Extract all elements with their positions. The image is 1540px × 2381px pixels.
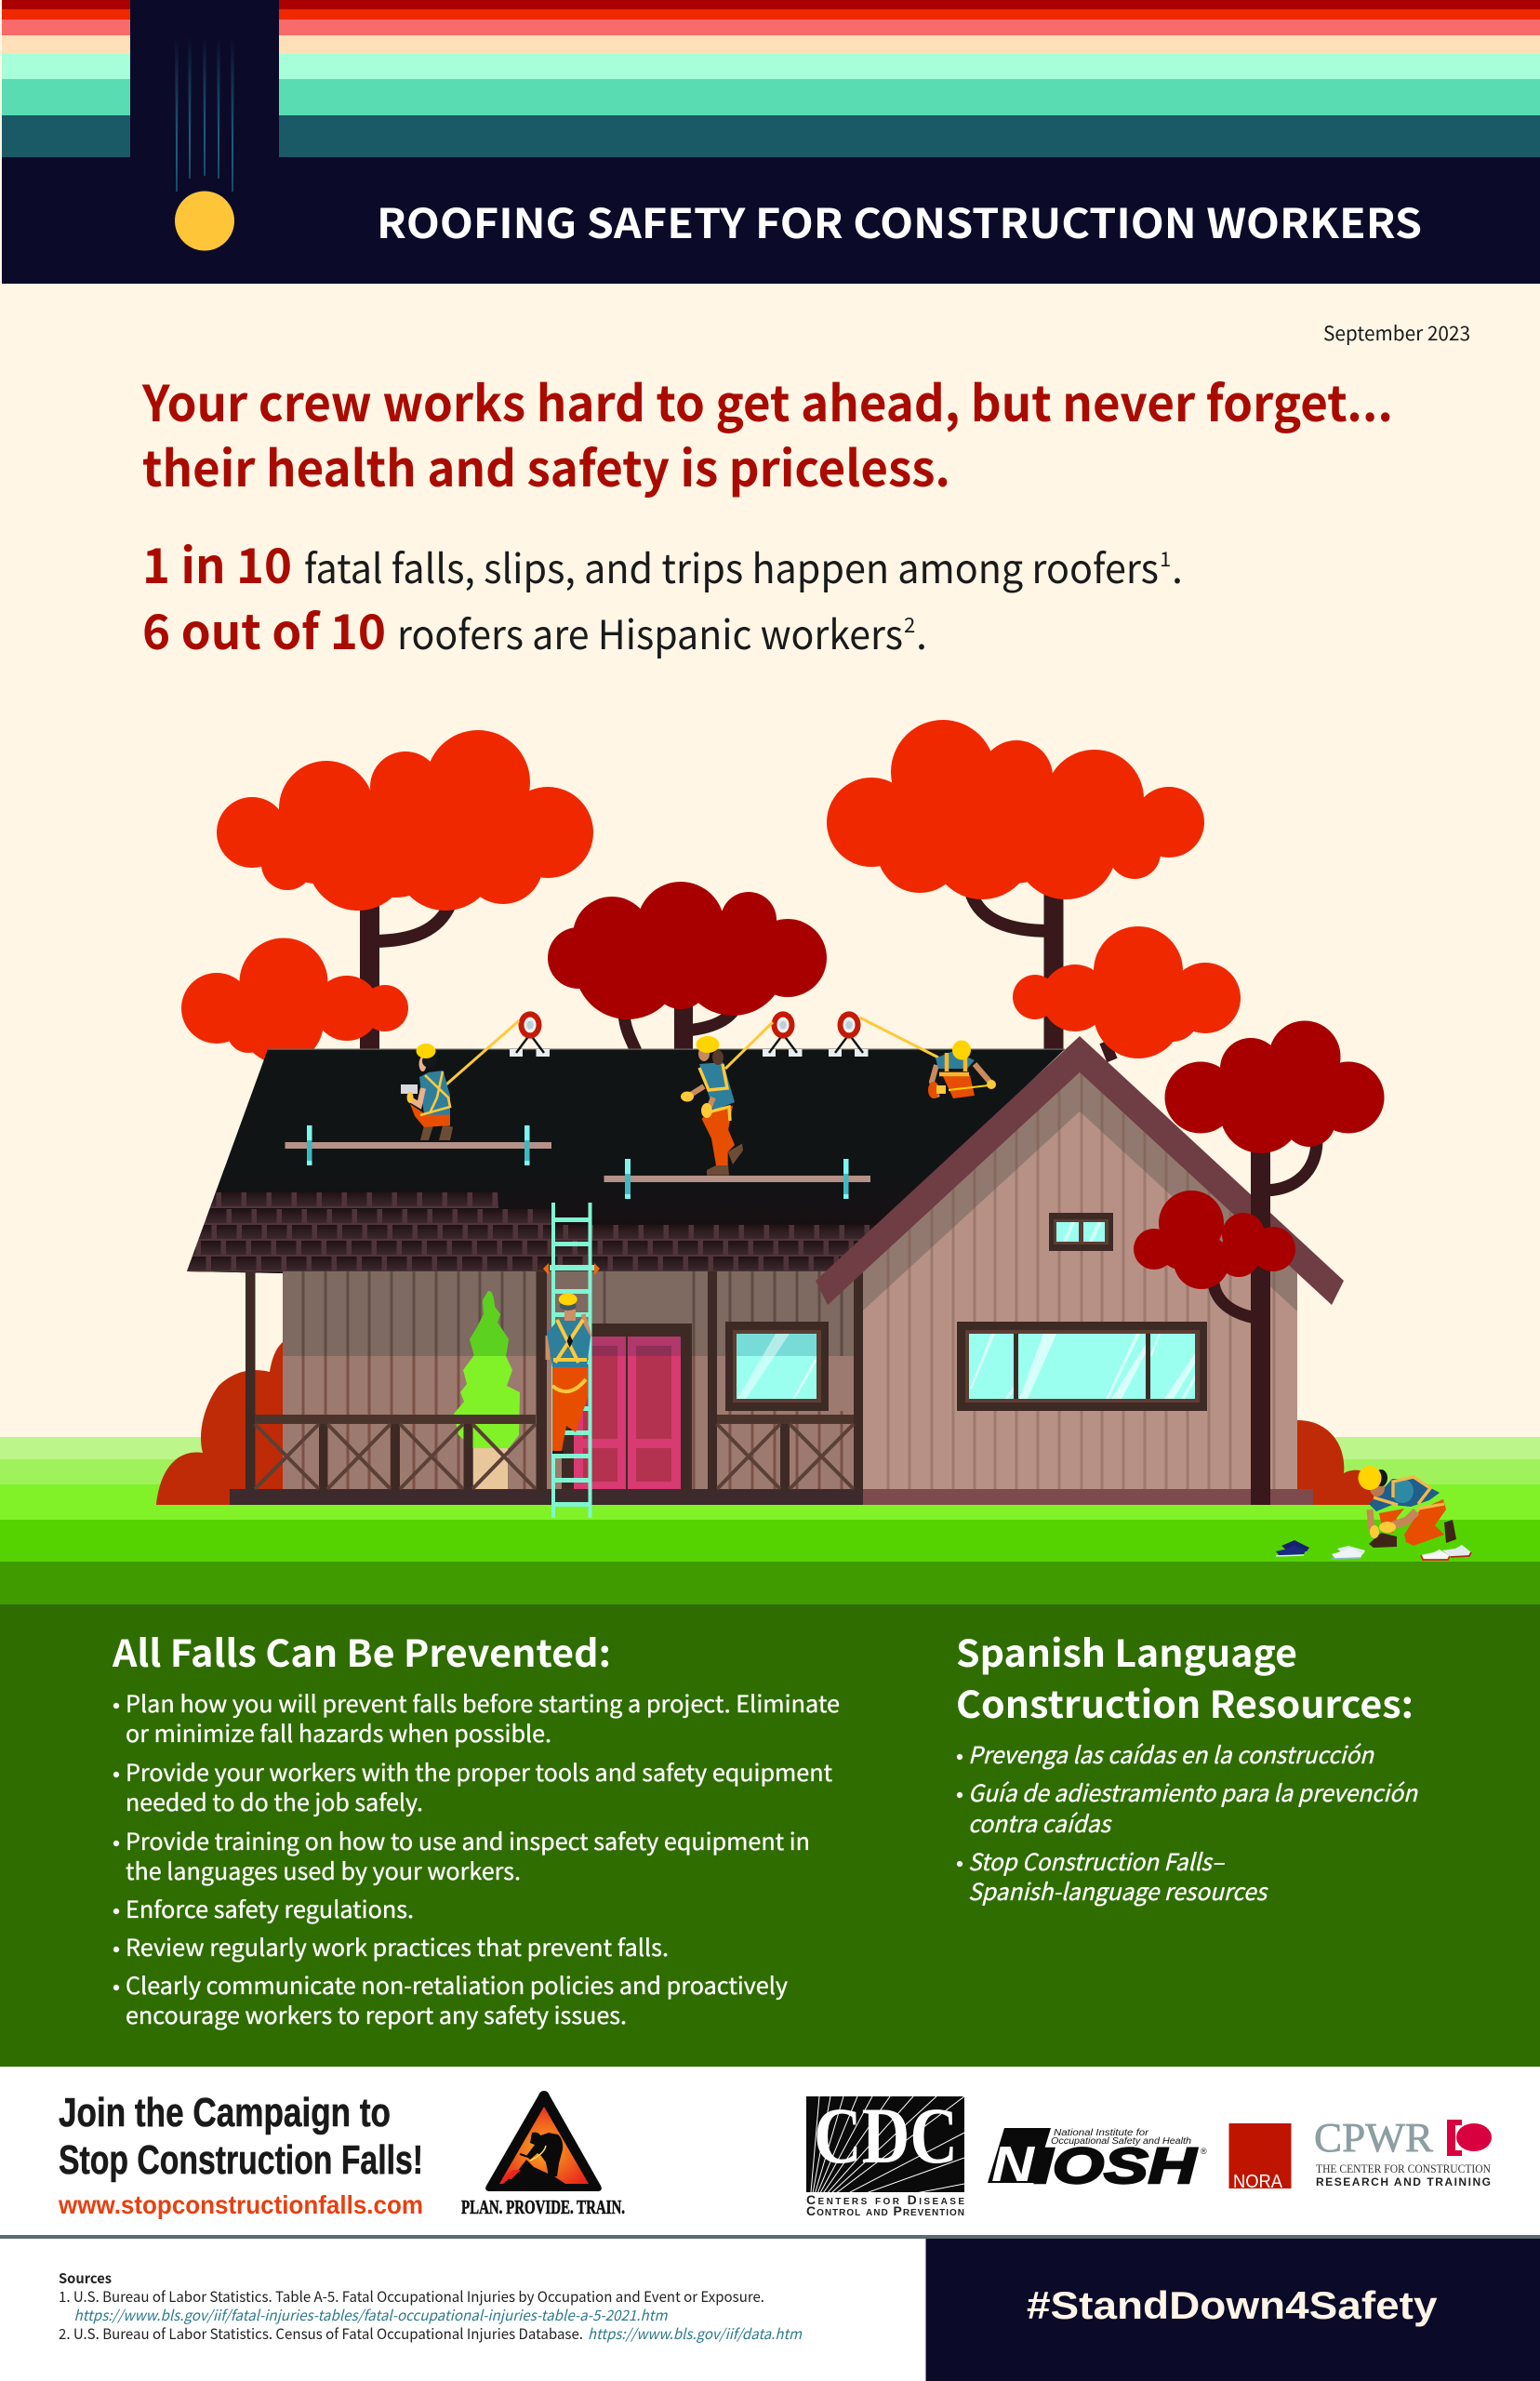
campaign url: www.stopconstructionfalls.com bbox=[58, 2190, 423, 2219]
list: prevention steps: or minimize fall hazards when possible. bbox=[126, 1716, 551, 1749]
title: ROOFING SAFETY FOR CONSTRUCTION WORKERS bbox=[377, 191, 1422, 250]
campaign heading: Join the Campaign to bbox=[59, 2090, 391, 2135]
date: September 2023 bbox=[1323, 319, 1470, 347]
panel: sources: 2. U.S. Bureau of Labor Statistics. Census of Fatal Occupational Injuries Database. bbox=[59, 2323, 583, 2344]
logo: NORA: NORA bbox=[1233, 2172, 1283, 2192]
headline: their health and safety is priceless. bbox=[142, 431, 950, 501]
logo: CDC bbox=[806, 2091, 964, 2218]
header banner bbox=[2, 0, 1540, 284]
tree: dark red right bbox=[1134, 1021, 1384, 1505]
list: prevention steps: needed to do the job safely. bbox=[126, 1785, 423, 1818]
worker on roof: measuring bbox=[859, 1018, 996, 1098]
headline: Your crew works hard to get ahead, but never forget... bbox=[141, 366, 1393, 436]
tree: small red left bbox=[181, 938, 408, 1064]
logo: NIOSH: N bbox=[991, 2136, 1035, 2192]
bushes behind house bbox=[156, 1342, 1376, 1505]
panel: sources: https://www.bls.gov/iif/data.htm bbox=[588, 2323, 803, 2344]
worker on roof: walking bbox=[681, 1022, 773, 1176]
panel: hashtag: #StandDown4Safety bbox=[1027, 2283, 1438, 2327]
logo: CDC: CDC bbox=[814, 2091, 958, 2180]
porch posts, railing and floor bbox=[230, 1271, 863, 1505]
logo: CPWR: CPWR bbox=[1314, 2115, 1434, 2161]
tree: large red left bbox=[217, 730, 593, 1051]
panel: sources bbox=[0, 2239, 926, 2381]
roof planks and brackets bbox=[285, 1125, 870, 1199]
panel: sources: https://www.bls.gov/iif/fatal-injuries-tables/fatal-occupational-injuries-table-a-5-2021.htm bbox=[74, 2305, 668, 2325]
list: Spanish resources: contra caídas bbox=[968, 1806, 1112, 1840]
campaign heading bbox=[59, 2090, 423, 2183]
tree: dark red centre bbox=[548, 882, 827, 1051]
house: gable wall bbox=[862, 1051, 1313, 1505]
list: prevention steps: Enforce safety regulations. bbox=[126, 1892, 414, 1925]
heading: Spanish Language Construction Resources bbox=[956, 1624, 1414, 1729]
logo: CDC: Centers for Disease bbox=[806, 2192, 964, 2207]
list: prevention steps: encourage workers to report any safety issues. bbox=[126, 1998, 627, 2031]
list: prevention steps: Review regularly work practices that prevent falls. bbox=[126, 1930, 669, 1963]
cypress plant bbox=[454, 1291, 520, 1489]
list: prevention steps: Provide training on how to use and inspect safety equipment in bbox=[126, 1824, 810, 1857]
worker on ground tying boot bbox=[1358, 1466, 1456, 1548]
heading: Spanish Language Construction Resources: Construction Resources: bbox=[956, 1675, 1414, 1729]
logo: CPWR: THE CENTER FOR CONSTRUCTION bbox=[1316, 2162, 1492, 2175]
list: prevention steps: Clearly communicate non-retaliation policies and proactively bbox=[126, 1968, 788, 2002]
logo: NIOSH: IOSH bbox=[1034, 2138, 1197, 2194]
tree: small red right bbox=[1013, 926, 1241, 1058]
divider bbox=[0, 2235, 1540, 2239]
logo: CPWR bbox=[1314, 2115, 1492, 2188]
heading: Spanish Language Construction Resources: Spanish Language bbox=[956, 1624, 1297, 1678]
statistic: 6 out of 10: 2 bbox=[904, 609, 915, 639]
list: Spanish resources: Spanish-language resources bbox=[968, 1874, 1268, 1908]
porch window bbox=[725, 1322, 829, 1411]
list: Spanish resources: Stop Construction Falls– bbox=[968, 1844, 1226, 1878]
logo: CDC: Control and Prevention bbox=[806, 2203, 964, 2218]
list: Spanish resources: Guía de adiestramiento para la prevención bbox=[968, 1776, 1419, 1809]
worker on ladder bbox=[547, 1293, 591, 1454]
heading: All Falls Can Be Prevented: All Falls Can Be Prevented: bbox=[112, 1624, 611, 1678]
logo: NORA bbox=[1229, 2123, 1291, 2192]
logo: NIOSH bbox=[988, 2128, 1207, 2194]
statistic: 6 out of 10: 6 out of 10 bbox=[142, 593, 386, 663]
panel: hashtag bbox=[926, 2239, 1540, 2381]
foliage: small dark bush bbox=[1134, 1190, 1295, 1289]
logo: NIOSH: ® bbox=[1201, 2147, 1207, 2156]
statistic: 1 in 10: 1 in 10 bbox=[142, 527, 292, 597]
ground stripes bbox=[0, 1437, 1540, 1604]
small gable window bbox=[1049, 1213, 1113, 1251]
panel: sources: Sources bbox=[59, 2268, 112, 2288]
large gable window bbox=[957, 1322, 1207, 1411]
gable rake bbox=[816, 1036, 1344, 1305]
worker on roof: kneeling with drill bbox=[401, 1021, 519, 1140]
logo: NIOSH: National Institute for bbox=[1054, 2128, 1149, 2138]
logo: plan provide train triangle bbox=[485, 2091, 602, 2191]
ladder bbox=[543, 1203, 600, 1518]
headline bbox=[141, 366, 1393, 501]
list: prevention steps: the languages used by your workers. bbox=[126, 1854, 521, 1887]
list: Spanish resources bbox=[957, 1737, 1419, 1908]
house: porch wall bbox=[283, 1271, 863, 1489]
list: prevention steps: Plan how you will prevent falls before starting a project. Eliminate bbox=[126, 1686, 840, 1720]
campaign heading: Stop Construction Falls! bbox=[59, 2137, 423, 2183]
house: main roof bbox=[177, 1049, 1069, 1284]
list: prevention steps: Provide your workers with the proper tools and safety equipment bbox=[126, 1755, 833, 1789]
list: Spanish resources: Prevenga las caídas en la construcción bbox=[968, 1737, 1375, 1771]
logo tagline: PLAN. PROVIDE. TRAIN. bbox=[461, 2196, 625, 2218]
statistic: 6 out of 10: . bbox=[916, 604, 927, 661]
statistic: 1 in 10 bbox=[142, 527, 1183, 597]
list: prevention steps bbox=[113, 1686, 840, 2031]
roof anchors bbox=[510, 1011, 869, 1057]
logo: NIOSH: Occupational Safety and Health bbox=[1051, 2136, 1191, 2147]
shoes on ground bbox=[1276, 1540, 1471, 1560]
statistic: 1 in 10: . bbox=[1172, 538, 1183, 595]
panel: prevention and resources bbox=[0, 1604, 1540, 2067]
statistic: 1 in 10: 1 bbox=[1160, 543, 1171, 573]
tree: large red right bbox=[827, 720, 1204, 1060]
panel: sources: 1. U.S. Bureau of Labor Statistics. Table A-5. Fatal Occupational Injuries by Occupation and Event or Exposure. bbox=[59, 2286, 764, 2307]
panel: campaign logos bbox=[0, 2067, 1540, 2235]
statistic: 6 out of 10 bbox=[142, 593, 927, 663]
statistic: 6 out of 10: roofers are Hispanic workers bbox=[397, 604, 903, 661]
logo: CPWR: RESEARCH AND TRAINING bbox=[1316, 2175, 1491, 2188]
door bbox=[562, 1324, 692, 1489]
icon: falling sun bbox=[175, 192, 234, 251]
statistic: 1 in 10: fatal falls, slips, and trips happen among roofers bbox=[304, 538, 1159, 595]
